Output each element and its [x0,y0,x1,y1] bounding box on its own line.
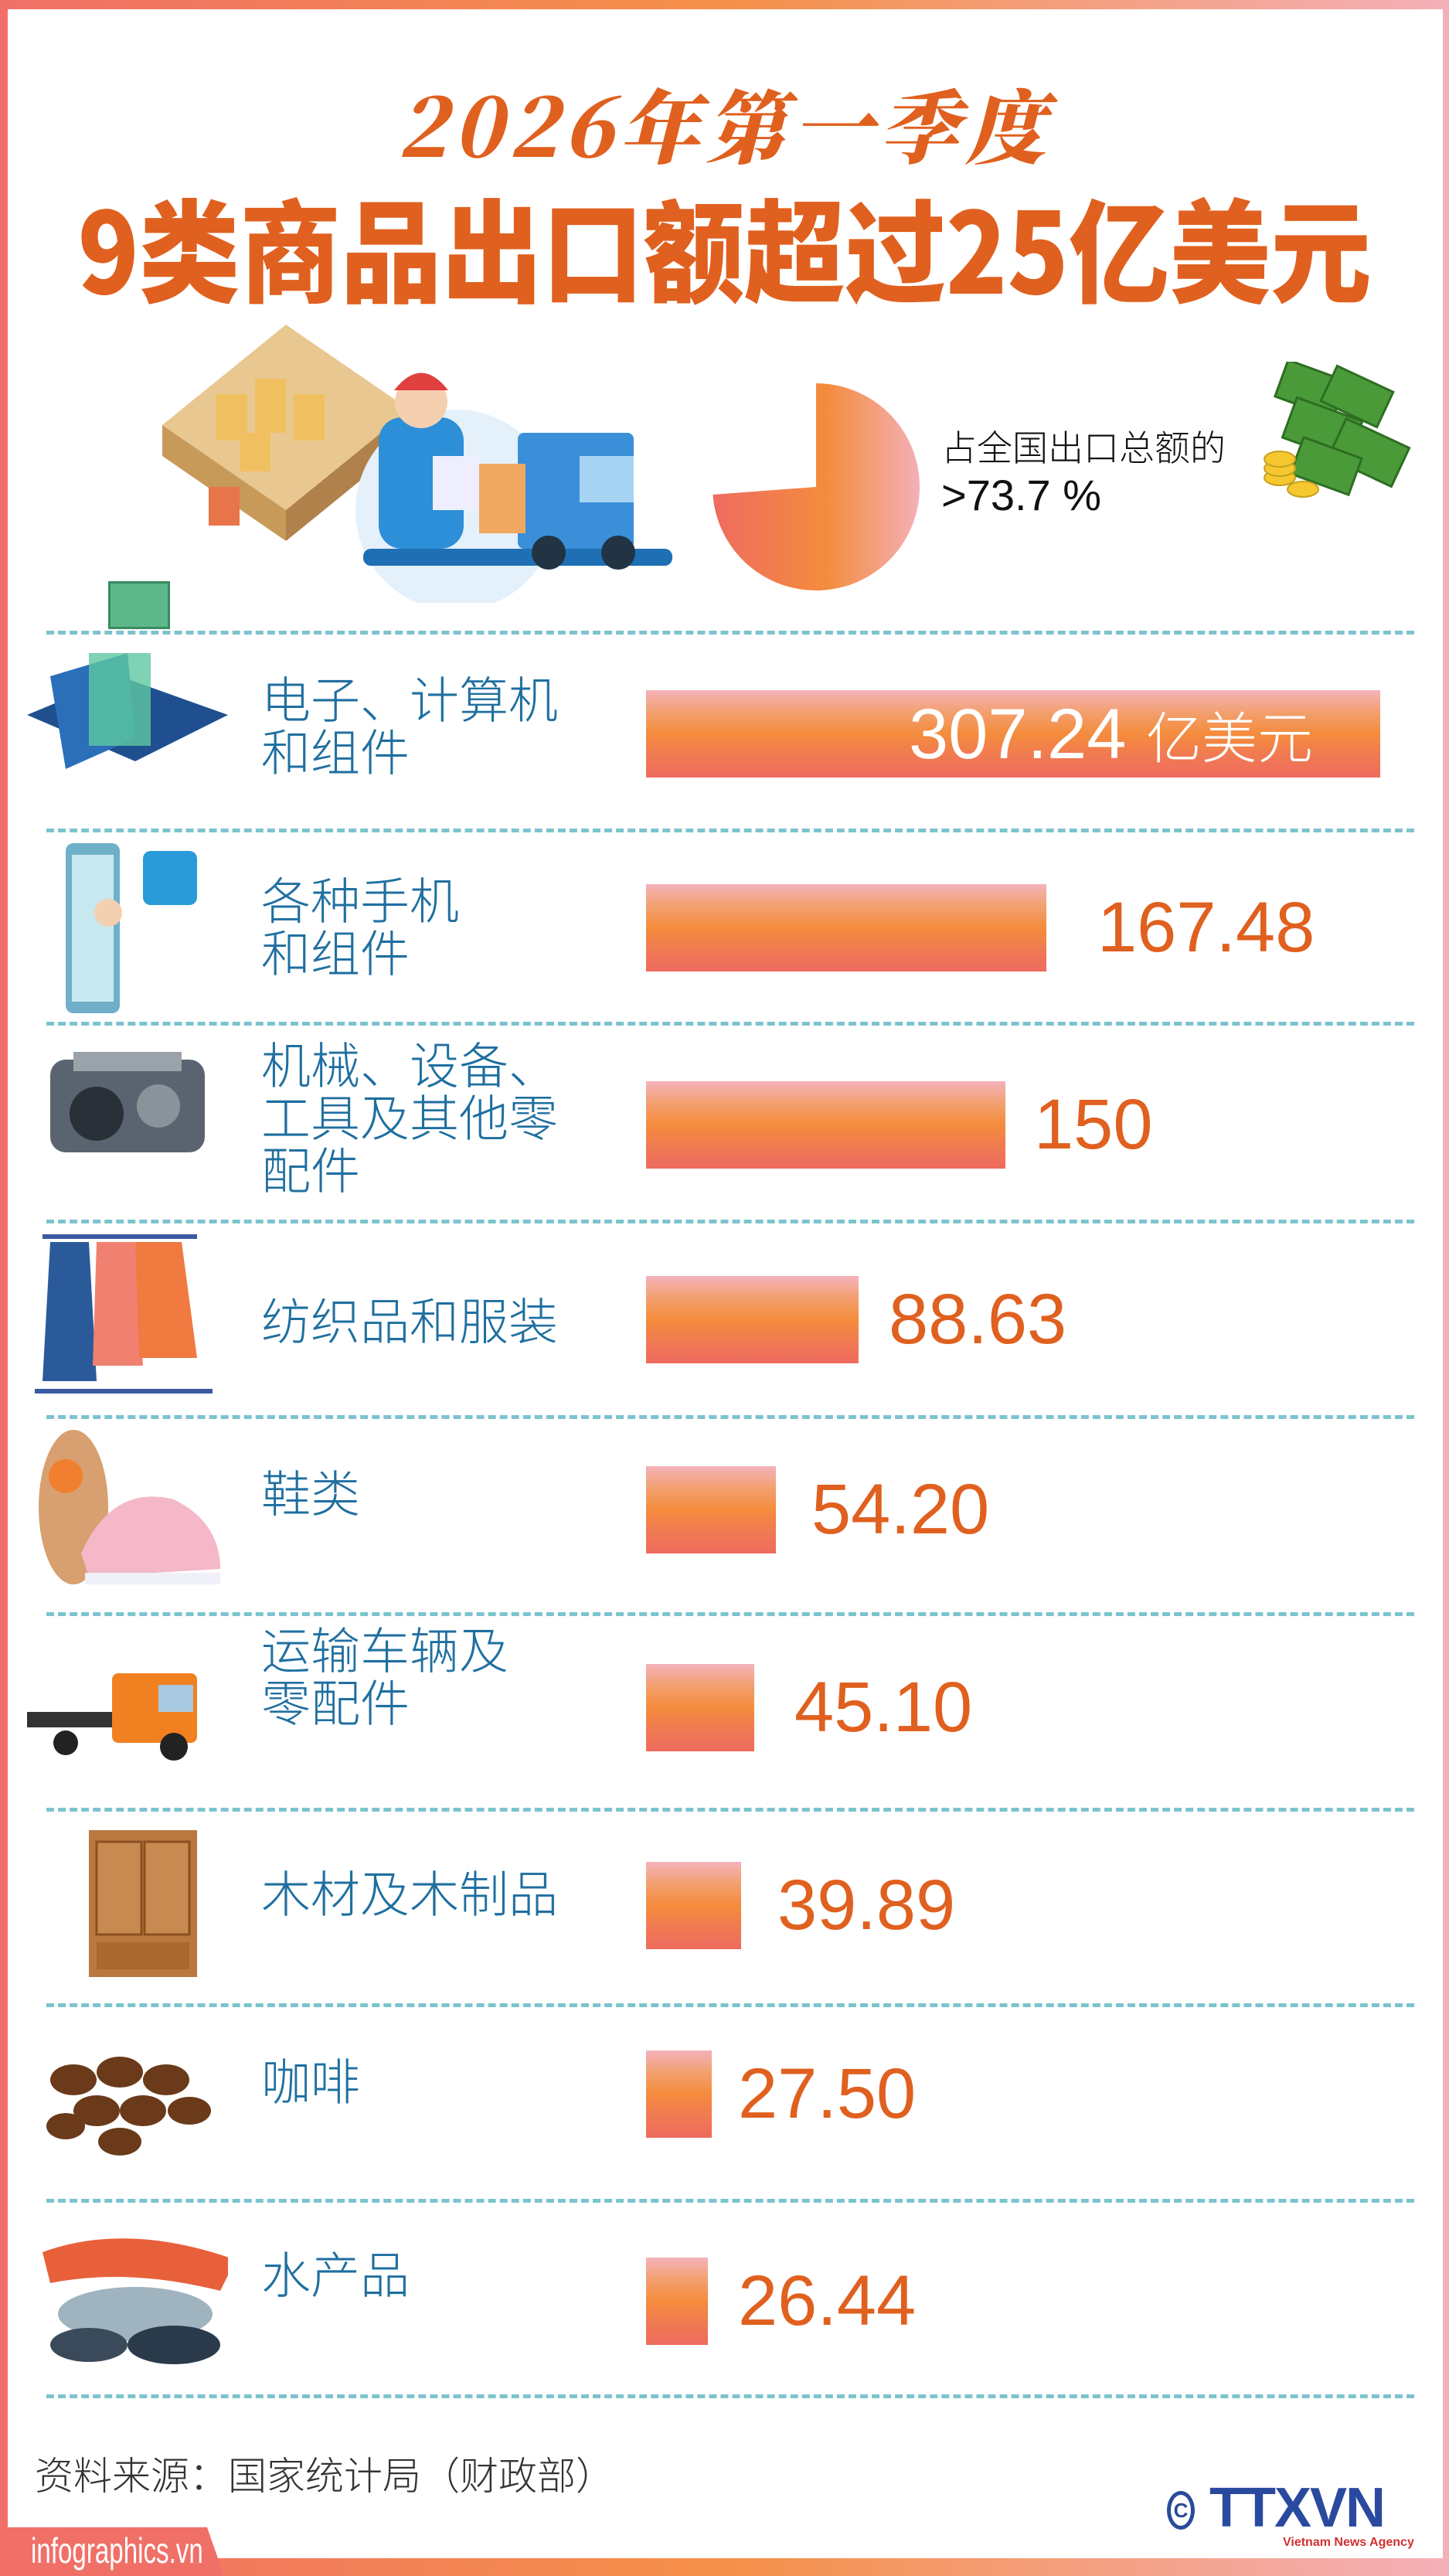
row 3: machinery [50,1027,1153,1203]
value: 54.20 [811,1470,989,1549]
bar [646,1081,1005,1169]
value: 167.48 [1097,888,1315,967]
source text: 资料来源：国家统计局（财政部） [35,2445,614,2501]
bar [646,1664,754,1751]
icon: clothes rack [35,1234,213,1393]
value: 45.10 [794,1668,972,1747]
icon: engine [50,1052,205,1152]
pie chart: 73.7% [713,383,920,590]
label [261,1027,558,1203]
row 6: vehicles [27,1612,972,1761]
row 4: textiles [35,1234,1066,1393]
title line 2: 9类商品出口额超过25亿美元 [78,164,1371,326]
label: 电子、计算机 [261,662,558,733]
label [261,863,459,986]
row 2: phones [66,843,1315,1013]
label: 水产品 [261,2237,410,2308]
icon: circuit board [108,581,170,629]
label [261,1612,509,1736]
label: 工具及其他零 [261,1080,558,1151]
row 8: coffee [46,2043,916,2156]
bar [646,690,1380,778]
label: 咖啡 [261,2043,360,2115]
illustration: warehouse and delivery [162,325,672,603]
row 9: seafood [43,2237,916,2364]
pie caption: >73.7 % [941,471,1101,519]
value: 27.50 [738,2054,916,2133]
icon: wardrobe [89,1830,197,1977]
value: 26.44 [738,2261,916,2340]
icon: truck [27,1673,197,1761]
logo: TTXVN: C [1174,2499,1188,2522]
label: 和组件 [261,915,410,986]
value: 150 [1034,1085,1153,1164]
row 1: electronics [27,653,1380,785]
site tab: infographics.vn [31,2530,203,2571]
icon: phone and chip [66,843,197,1013]
bar [646,2050,712,2138]
row dividers [46,631,1414,635]
icon: coffee beans [46,2057,211,2156]
label: 各种手机 [261,863,459,934]
bar [646,2258,708,2345]
label: 鞋类 [261,1455,360,1526]
label [261,662,558,785]
icon: money stack [1264,362,1411,498]
icon: laptop [27,653,228,769]
bar [646,1276,859,1363]
value: 307.24 亿美元 [909,693,1313,774]
pie caption: 占全国出口总额的 [941,420,1226,471]
label: 纺织品和服装 [261,1283,558,1354]
label: 木材及木制品 [261,1856,558,1927]
label: 和组件 [261,714,410,785]
row 7: wood [89,1830,955,1977]
site tab [8,2527,224,2576]
logo: TTXVN: TTXVN [1209,2477,1384,2539]
icon: shoes [39,1430,220,1584]
bar [646,1466,776,1553]
label: 零配件 [261,1665,410,1736]
value: 88.63 [889,1280,1066,1359]
logo: TTXVN: Vietnam News Agency [1283,2536,1414,2549]
label: 机械、设备、 [261,1027,558,1098]
icon: seafood [43,2238,228,2364]
row 5: footwear [39,1430,989,1584]
title line 1: 2026年第一季度 [397,64,1052,180]
bar [646,1862,741,1949]
value: 39.89 [777,1866,955,1945]
logo: TTXVN [1167,2477,1414,2549]
pie caption [941,420,1226,519]
label: 配件 [261,1132,360,1203]
bar [646,884,1046,972]
label: 运输车辆及 [261,1612,509,1683]
